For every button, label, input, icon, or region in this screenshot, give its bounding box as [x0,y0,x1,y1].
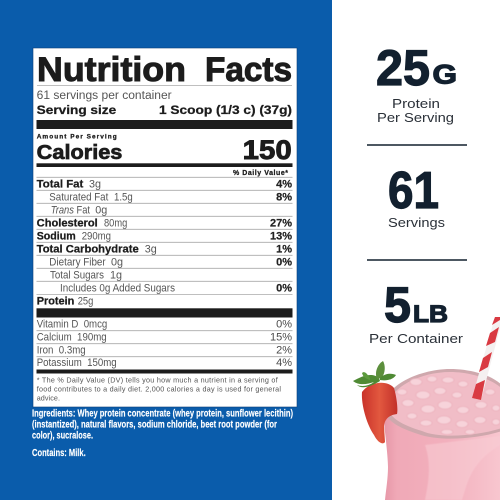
row: calcium: Calcium 190mg [37,331,107,343]
row: iron: 2% [276,344,292,356]
row: total fat: Total Fat [37,178,84,190]
row: potassium: Potassium 150mg [37,357,117,369]
row: dietary fiber [49,256,292,268]
footnote [37,376,281,402]
row: saturated fat [49,191,292,203]
foam bubbles [397,376,500,434]
row: total sugars: 1g [110,269,122,281]
ingredients text: Ingredients: Whey protein concentrate (whey protein, sunflower lecithin) [32,408,293,420]
straw [472,317,500,400]
row: vitamin D: Vitamin D 0mcg [37,318,107,330]
stat: 25G protein per serving: Per Serving [377,110,454,125]
row: total carbohydrate: 3g [145,243,157,255]
row: total carbohydrate: 1% [276,243,292,255]
row: calcium [37,331,292,343]
text: serving size: Serving size [37,105,116,117]
row: protein: Protein [37,295,75,307]
row: dietary fiber: Dietary Fiber [49,256,106,268]
row: sodium [37,230,292,242]
row: vitamin D: 0% [276,318,292,330]
ingredients text: color), sucralose. [32,429,93,441]
stat: 25G protein per serving: 25 [376,40,430,96]
illustration: strawberry milkshake [353,317,500,500]
row: total carbohydrate: Total Carbohydrate [37,243,139,255]
row: trans fat: 0g [95,204,107,216]
strawberry [353,361,397,443]
row: potassium: 4% [276,357,292,369]
row: sodium: 13% [270,230,292,242]
row: sodium: 290mg [82,230,111,242]
stat: 25G protein per serving [376,40,457,125]
row: total fat [37,178,292,190]
glass rim [384,369,500,439]
row: cholesterol: Cholesterol [37,217,98,229]
row: cholesterol [37,217,292,229]
row: added sugars [60,282,292,294]
stat: 25G protein per serving: Protein [392,96,440,111]
text: calories row [37,135,292,165]
row: added sugars: 0% [276,282,292,294]
row: vitamin D [37,318,292,330]
row: total fat: 4% [276,178,292,190]
panel: nutrition facts label [33,48,297,407]
text: servings per container: 61 servings per container [37,90,172,102]
stat: 5LB per container: LB [413,301,448,328]
text: amount per serving: Amount Per Serving [37,134,117,140]
footnote: advice. [37,393,60,402]
text: calories row: Calories [37,142,122,164]
foam [388,372,500,436]
row: total sugars: Total Sugars [50,269,105,281]
row: dietary fiber: 0% [276,256,292,268]
row: calcium: 15% [270,331,292,343]
stat: 25G protein per serving: G [432,60,457,90]
ingredients text: (instantized), natural flavors, sodium chloride, beet root powder (for [32,418,277,430]
text: percent daily value header: % Daily Value* [233,170,288,177]
footnote: food contributes to a daily diet. 2,000 calories a day is used for general [37,384,281,394]
text: serving size [37,105,292,117]
row: iron: Iron 0.3mg [37,344,86,356]
contains milk: Contains: Milk. [32,447,86,459]
stat: 5LB per container: 5 [384,277,411,333]
heading: Nutrition Facts: Nutrition [37,51,186,89]
row: added sugars: Includes 0g Added Sugars [60,282,176,294]
row: total carbohydrate [37,243,292,255]
text: calories row: 150 [243,135,292,165]
row: cholesterol: 80mg [104,217,127,229]
row: total fat: 3g [89,178,101,190]
stat: 61 servings: 61 [388,162,439,220]
row: protein: 25g [78,295,93,307]
row: saturated fat: 1.5g [114,191,133,203]
ingredients text [32,408,293,459]
row: sodium: Sodium [37,230,76,242]
stat: 5LB per container: Per Container [369,331,464,346]
heading: Nutrition Facts: Facts [205,51,292,89]
row: iron [37,344,292,356]
row: cholesterol: 27% [270,217,292,229]
footnote: * The % Daily Value (DV) tells you how much a nutrient in a serving of [37,376,278,385]
stat: 5LB per container [369,277,464,346]
stat: 61 servings: Servings [388,215,446,230]
text: serving size: 1 Scoop (1/3 c) (37g) [159,105,292,117]
row: trans fat: Trans Fat [51,204,90,216]
blue background panel [0,0,332,500]
row: saturated fat: 8% [276,191,292,203]
row: protein [37,295,93,307]
row: saturated fat: Saturated Fat [49,191,108,203]
row: dietary fiber: 0g [111,256,123,268]
row: potassium [37,357,292,369]
glass body [383,400,500,500]
heading: Nutrition Facts [37,51,292,89]
